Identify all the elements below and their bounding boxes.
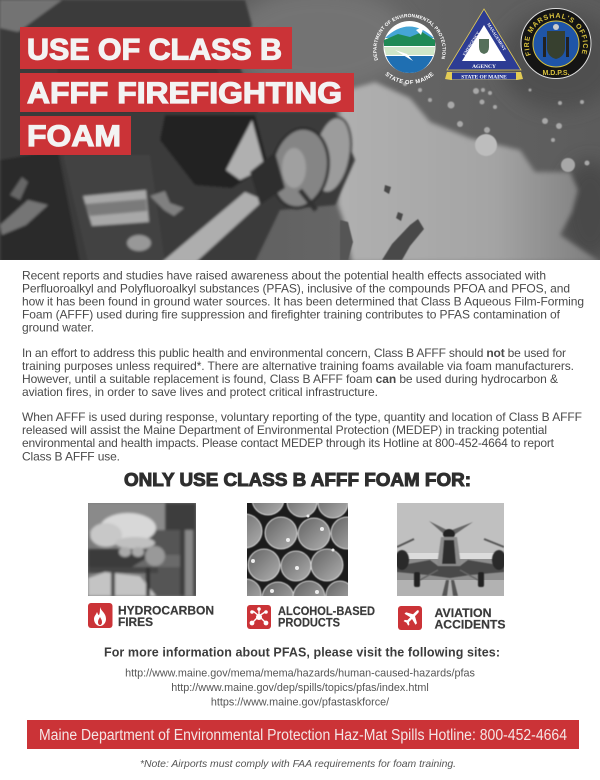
- title: FOAM: [27, 120, 121, 153]
- body text: paragraph 1: ground water.: [22, 320, 94, 334]
- logo: Department of Environmental Protection: STATE OF MAINE: [386, 72, 434, 84]
- label: alcohol-based products: PRODUCTS: [278, 616, 340, 630]
- logo: Department of Environmental Protection: [373, 14, 446, 84]
- photo: hydrocarbon fire training: [88, 503, 196, 596]
- label: hydrocarbon fires: HYDROCARBON: [118, 604, 214, 618]
- logo: Fire Marshal's Office: FIRE MARSHAL'S OFFICE: [524, 13, 588, 56]
- body text: paragraph 3: released will assist the Maine Department of Environmental Protection (MEDEP) in tracking potential: [22, 423, 547, 437]
- hotline banner: [27, 720, 579, 749]
- body text: paragraph 1: how it has been found in ground water sources. It has been determined that Class B Aqueous Film-Forming: [22, 294, 584, 308]
- reflective cuff: [83, 190, 149, 226]
- foam spray: [338, 82, 600, 262]
- firefighter body: [0, 0, 355, 262]
- body text: paragraph 2: However, until a suitable replacement is found, Class B AFFF foam can be used during hydrocarbon &: [22, 372, 558, 386]
- heading: only use class B AFFF foam for: ONLY USE CLASS B AFFF FOAM FOR:: [124, 469, 471, 490]
- nozzle: [319, 116, 354, 194]
- photo: vintage aircraft: [395, 503, 506, 596]
- logo: Maine Emergency Management Agency: EMERGENCY: [462, 30, 481, 57]
- label: aviation accidents: [434, 606, 506, 632]
- logo: Department of Environmental Protection: DEPARTMENT OF ENVIRONMENTAL PROTECTION: [373, 14, 446, 61]
- body text: paragraph 1: [22, 268, 584, 334]
- body text: paragraph 2: [22, 346, 574, 399]
- body text: paragraph 3: environmental and health impacts. Please contact MEDEP through its Hotline at 800-452-4664 to report: [22, 436, 555, 450]
- footnote: *Note: Airports must comply with FAA requirements for foam training.: [140, 759, 456, 770]
- links: https://www.maine.gov/pfastaskforce/: [211, 696, 389, 708]
- label: alcohol-based products: [278, 604, 375, 630]
- label: aviation accidents: AVIATION: [434, 606, 492, 620]
- logo: Fire Marshal's Office: [520, 8, 592, 79]
- body text: paragraph 2: In an effort to address this public health and environmental concern, Class B AFFF should not be used for: [22, 346, 566, 360]
- photo: stacked drums: [247, 503, 348, 596]
- logo: Maine Emergency Management Agency: [445, 9, 523, 80]
- title: USE OF CLASS B: [27, 34, 282, 66]
- icon: airplane: [398, 606, 422, 630]
- body text: paragraph 1: Perfluoroalkyl and Polyfluoroalkyl substances (PFAS), inclusive of the compounds PFOA and PFOS, and: [22, 282, 570, 296]
- logo: Maine Emergency Management Agency: STATE OF MAINE: [461, 74, 507, 80]
- label: hydrocarbon fires: [118, 604, 214, 629]
- logo: Maine Emergency Management Agency: MANAGEMENT: [486, 22, 507, 52]
- glove cuff: [226, 120, 265, 180]
- label: hydrocarbon fires: FIRES: [118, 615, 153, 629]
- icon: flame: [88, 603, 112, 628]
- body text: paragraph 3: When AFFF is used during response, voluntary reporting of the type, quantity and location of Class B AFFF: [22, 410, 582, 424]
- hero photo: firefighter with hose nozzle: [0, 0, 600, 262]
- harness hook: [0, 200, 48, 235]
- links: [125, 668, 476, 708]
- logo: Maine Emergency Management Agency: AGENCY: [472, 64, 496, 70]
- links: http://www.maine.gov/mema/mema/hazards/human-caused-hazards/pfas: [125, 668, 476, 680]
- more information heading: For more information about PFAS, please visit the following sites:: [104, 646, 500, 660]
- body text: paragraph 1: Recent reports and studies have raised awareness about the potential health effects associated with: [22, 268, 546, 282]
- hose: [162, 192, 264, 262]
- body text: paragraph 3: [22, 410, 582, 464]
- body text: paragraph 2: aviation fires, in order to save lives and protect critical infrastructure.: [22, 385, 378, 399]
- links: http://www.maine.gov/dep/spills/topics/pfas/index.html: [171, 682, 429, 694]
- icon: molecule: [247, 605, 271, 629]
- logo: Fire Marshal's Office: M.D.P.S.: [542, 70, 570, 77]
- title: [20, 27, 354, 155]
- body text: paragraph 3: Class B AFFF use.: [22, 450, 120, 464]
- label: aviation accidents: ACCIDENTS: [434, 618, 506, 632]
- label: alcohol-based products: ALCOHOL-BASED: [278, 604, 375, 618]
- body text: paragraph 1: Foam (AFFF) used during fire suppression and firefighter training contributes to PFAS contamination of: [22, 308, 561, 322]
- title: AFFF FIREFIGHTING: [27, 77, 342, 110]
- body text: paragraph 2: training purposes unless required*. There are alternative training foams available via foam manufacturers.: [22, 359, 574, 373]
